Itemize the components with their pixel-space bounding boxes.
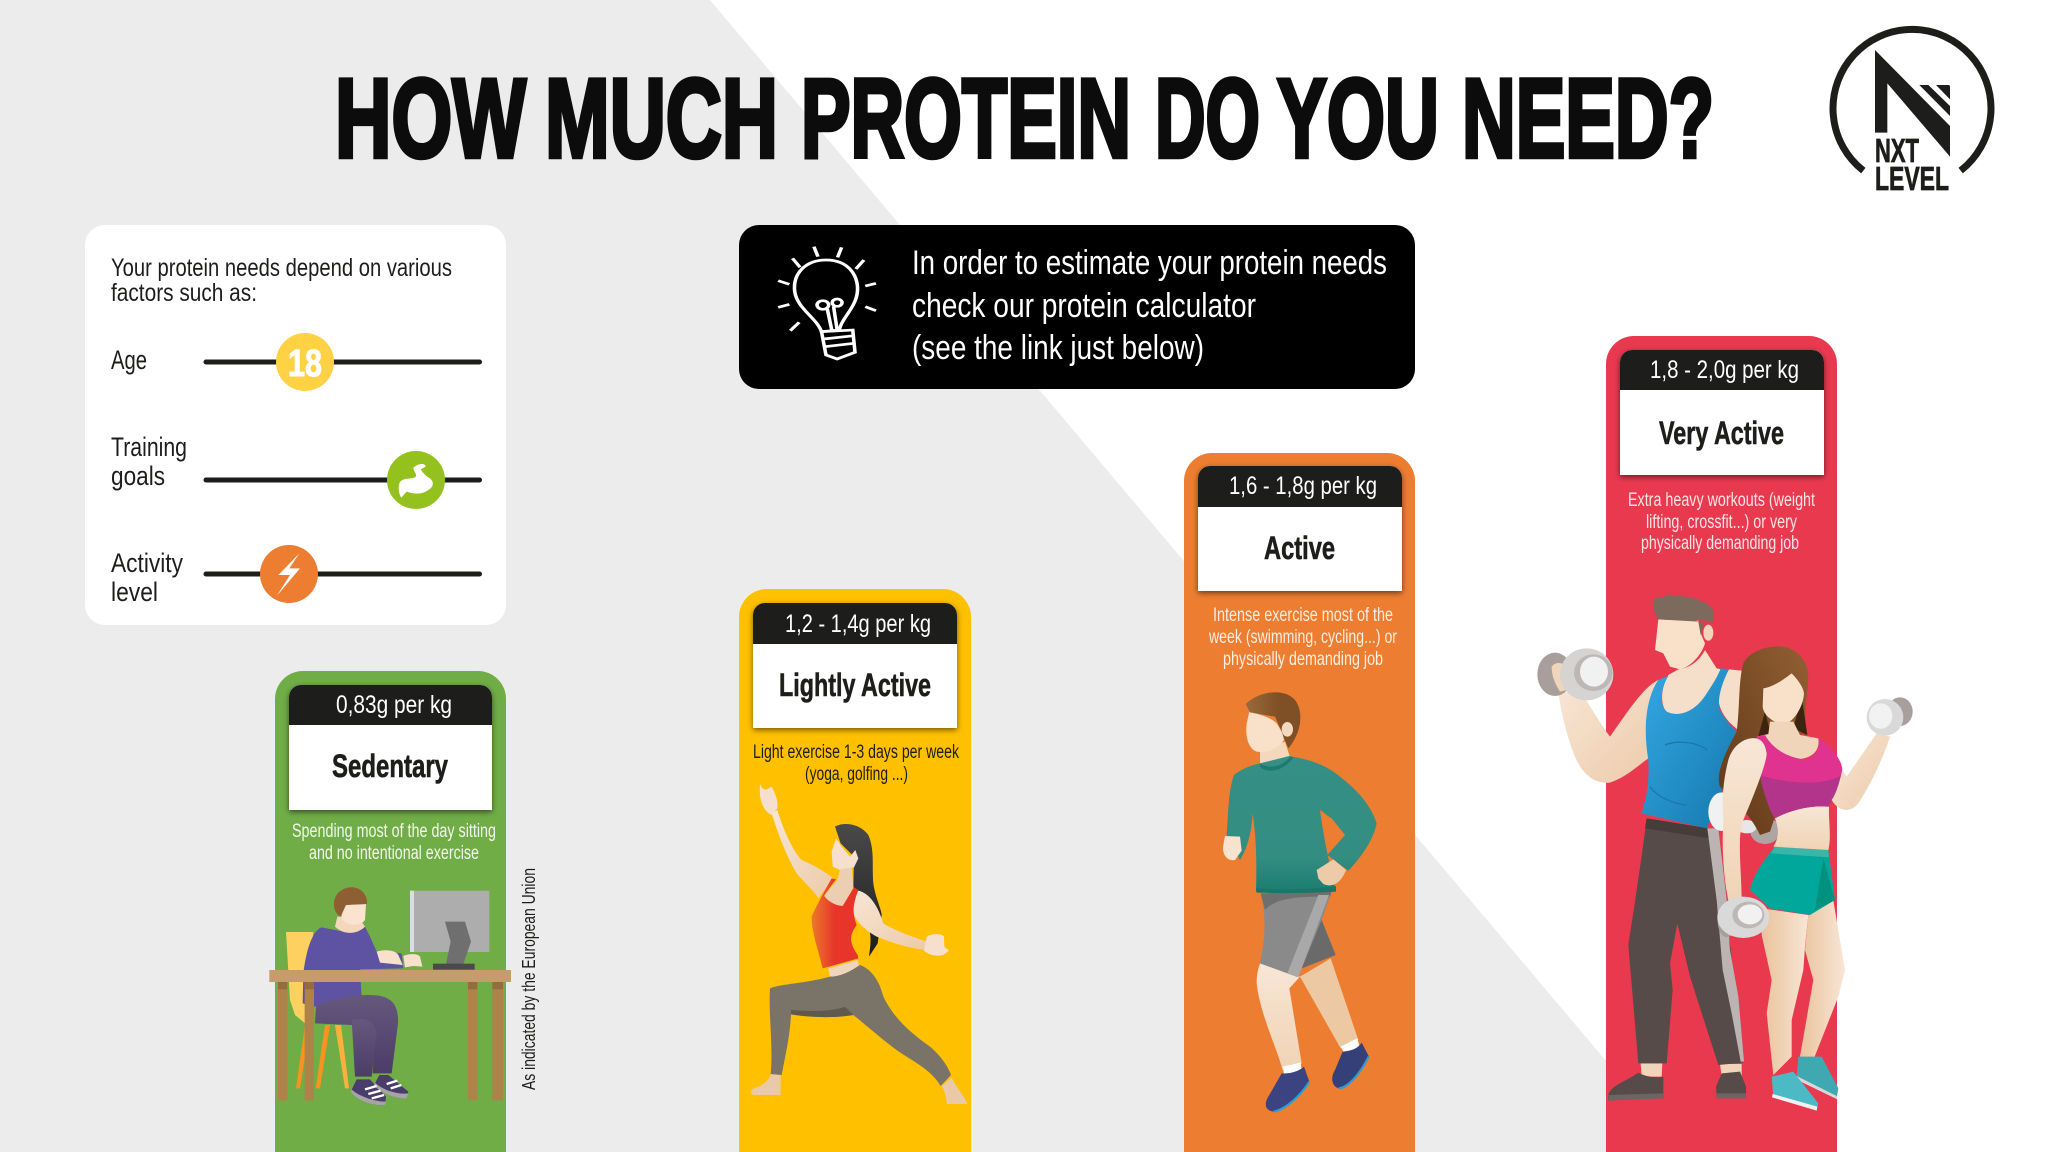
card header: active: [1198, 466, 1402, 591]
factor: activity level slider: level: [111, 577, 158, 607]
logo: NXT Level: LEVEL: [1875, 160, 1949, 197]
description: very active: [1628, 490, 1816, 554]
title: PROTEIN: [801, 56, 1131, 181]
card header: sedentary: Sedentary: [332, 748, 448, 784]
source note: As indicated by the European Union: [519, 868, 539, 1090]
callout text: In order to estimate your protein needs: [912, 244, 1387, 282]
title: HOW: [335, 56, 526, 181]
card header: very active: 1,8 - 2,0g per kg: [1650, 356, 1799, 384]
man: [1537, 593, 1746, 1101]
logo: NXT Level: NXT: [1875, 132, 1919, 169]
card header: very active: Very Active: [1659, 415, 1784, 451]
factor: age slider: Age: [111, 345, 147, 375]
intro text: factors such as:: [111, 279, 257, 307]
description: sedentary: and no intentional exercise: [309, 843, 479, 864]
card: active: [1184, 453, 1415, 1152]
title: NEED?: [1462, 56, 1714, 181]
factor: training goals slider: Training: [111, 432, 187, 462]
card header: sedentary: [289, 685, 492, 810]
panel: protein factors: [85, 225, 506, 625]
woman: [1717, 646, 1913, 1111]
illustration: man at desk: [269, 887, 511, 1105]
description: active: [1208, 605, 1397, 670]
dumbbell behind woman: [1708, 792, 1780, 844]
title: DO: [1155, 56, 1260, 181]
title: YOU: [1277, 56, 1439, 181]
factor: activity level slider: Activity: [111, 548, 183, 578]
title: MUCH: [545, 56, 778, 181]
description: very active: lifting, crossfit...) or very: [1646, 512, 1797, 533]
callout text: [912, 244, 1387, 367]
card: sedentary: [269, 671, 511, 1152]
card: lightly active: [739, 589, 971, 1152]
intro text: Your protein needs depend on various: [111, 254, 452, 282]
intro text: [111, 254, 452, 307]
card header: active: 1,6 - 1,8g per kg: [1229, 472, 1377, 500]
description: active: week (swimming, cycling...) or: [1208, 627, 1397, 648]
factor: activity level slider: [111, 545, 480, 607]
factor: age slider: [111, 333, 480, 391]
description: sedentary: [292, 821, 496, 864]
description: lightly active: (yoga, golfing ...): [805, 764, 908, 785]
title: [335, 56, 1714, 181]
callout text: (see the link just below): [912, 329, 1204, 367]
illustration: running man: [1223, 692, 1377, 1113]
description: active: Intense exercise most of the: [1213, 605, 1393, 626]
card header: sedentary: 0,83g per kg: [336, 691, 452, 719]
illustration: man and woman with dumbbells: [1537, 593, 1913, 1111]
card header: active: Active: [1264, 530, 1335, 566]
illustration: yoga woman: [751, 784, 967, 1104]
card: very active: [1537, 336, 1913, 1152]
factor: training goals slider: goals: [111, 461, 165, 491]
card header: lightly active: Lightly Active: [779, 667, 931, 703]
description: lightly active: Light exercise 1-3 days per week: [753, 742, 959, 763]
factor: age slider: 18: [288, 343, 322, 385]
factor: training goals slider: [111, 432, 480, 509]
description: sedentary: Spending most of the day sitting: [292, 821, 496, 842]
description: very active: physically demanding job: [1641, 533, 1799, 554]
card header: lightly active: 1,2 - 1,4g per kg: [785, 610, 931, 638]
description: active: physically demanding job: [1223, 649, 1383, 670]
description: lightly active: [753, 742, 959, 785]
callout: protein calculator: [739, 225, 1415, 389]
card header: very active: [1620, 350, 1824, 475]
logo: NXT Level: [1833, 29, 1991, 197]
description: very active: Extra heavy workouts (weight: [1628, 490, 1816, 511]
callout text: check our protein calculator: [912, 287, 1256, 325]
card header: lightly active: [753, 603, 957, 728]
icon: light bulb: [778, 247, 876, 359]
